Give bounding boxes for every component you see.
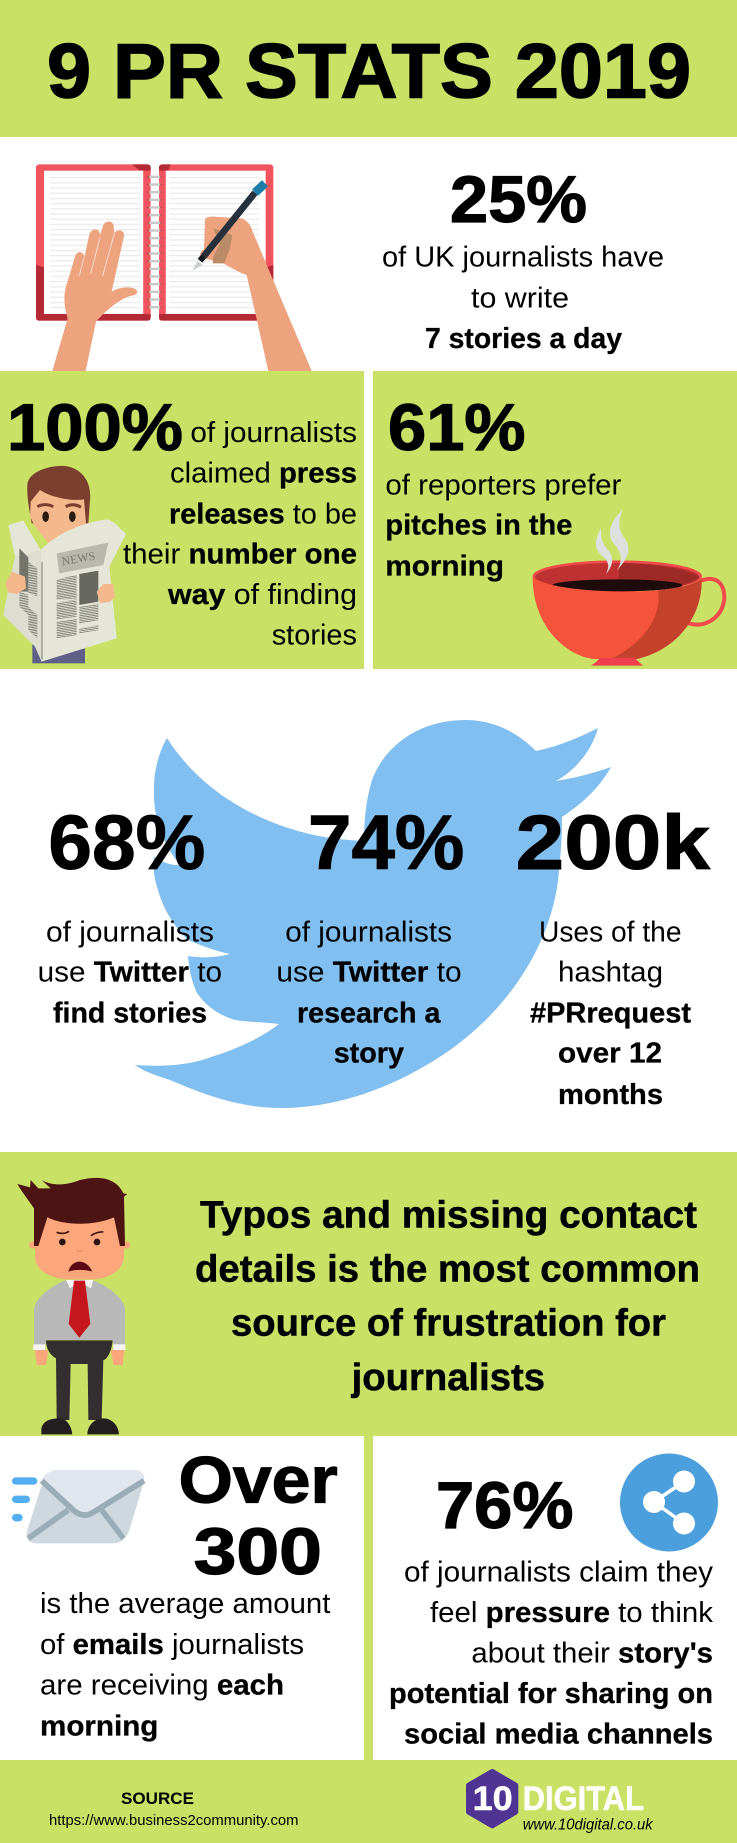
stat: 200k: 200k <box>516 800 710 886</box>
text: press releases: claimed press <box>170 458 357 490</box>
logo: 10 Digital: DIGITAL <box>523 1780 644 1818</box>
title: 9 PR STATS 2019 <box>47 29 691 115</box>
text: UK journalists: 7 stories a day <box>425 323 622 355</box>
stat: 68%: 68% <box>48 800 205 886</box>
icon: flying envelope <box>12 1470 144 1543</box>
panel: 25% stories a day <box>36 162 664 371</box>
stat: 76%: 76% <box>436 1468 573 1542</box>
icon: frustrated man <box>17 1178 130 1434</box>
text: average emails: is the average amount <box>40 1588 330 1620</box>
panel: twitter statistics <box>38 720 710 1111</box>
icon: twitter bird <box>135 720 611 1108</box>
title banner <box>0 0 737 137</box>
stat: over 300: Over <box>179 1443 338 1517</box>
text: press releases: of journalists <box>190 417 357 449</box>
left hand <box>52 221 137 371</box>
text: UK journalists: of UK journalists have <box>382 242 664 274</box>
text: reporters prefer: of reporters prefer <box>385 469 622 501</box>
text: press releases: releases to be <box>169 498 357 530</box>
text: research a story: research a <box>297 998 441 1030</box>
text: find stories: of journalists <box>46 917 214 949</box>
stat: 25%: 25% <box>450 162 587 236</box>
source credit: https://www.business2community.com <box>49 1812 298 1829</box>
logo: 10 Digital <box>469 1772 654 1833</box>
stat: 61%: 61% <box>388 390 526 464</box>
text: average emails: are receiving each <box>40 1669 284 1701</box>
pen <box>192 183 265 271</box>
heading: typos and missing contact details: journalists <box>351 1357 545 1399</box>
text: pressure to share: about their story's <box>471 1638 713 1670</box>
text: find stories <box>38 917 222 1030</box>
text: hashtag uses: months <box>558 1079 663 1111</box>
text: research a story: of journalists <box>285 917 452 949</box>
icon: share circle <box>620 1454 718 1552</box>
text: pressure to share: of journalists claim they <box>404 1557 714 1589</box>
text: hashtag uses: #PRrequest <box>530 998 691 1030</box>
source credit: SOURCE <box>121 1789 194 1808</box>
stat: over 300: 300 <box>194 1514 322 1588</box>
text: hashtag uses: over 12 <box>558 1038 662 1070</box>
text: research a story: use Twitter to <box>276 957 462 989</box>
stat: over 300 <box>179 1443 338 1588</box>
icon: red coffee cup <box>533 509 724 666</box>
text: average emails: of emails journalists <box>40 1629 304 1661</box>
logo: 10 Digital: 10 <box>473 1780 513 1818</box>
heading: typos and missing contact details: details is the most common <box>195 1249 700 1291</box>
text: hashtag uses <box>530 917 691 1111</box>
text: UK journalists: to write <box>471 282 569 314</box>
heading: typos and missing contact details <box>195 1194 700 1399</box>
newspaper masthead: NEWS <box>60 549 96 568</box>
text: find stories: find stories <box>53 998 207 1030</box>
steam <box>596 509 628 574</box>
text: reporters prefer: pitches in the <box>385 510 572 542</box>
text: press releases: stories <box>272 619 357 651</box>
panel: journalist frustration <box>0 1152 737 1436</box>
text: press releases: their number one <box>123 539 357 571</box>
icon: man reading newspaper <box>3 466 126 663</box>
stat: 74%: 74% <box>308 800 464 886</box>
text: pressure to share: potential for sharing on <box>389 1678 713 1710</box>
text: average emails <box>40 1588 330 1742</box>
text: research a story <box>276 917 462 1070</box>
text: pressure to share <box>389 1557 714 1750</box>
text: reporters prefer <box>385 469 622 582</box>
text: hashtag uses: hashtag <box>558 957 663 989</box>
heading: typos and missing contact details: source of frustration for <box>231 1303 666 1345</box>
icon: notebook with hands writing <box>36 164 312 371</box>
text: press releases: way of finding <box>167 579 357 611</box>
right hand and arm <box>200 217 312 371</box>
text: pressure to share: social media channels <box>404 1718 713 1750</box>
text: research a story: story <box>334 1038 404 1070</box>
panel: 76% social pressure <box>389 1454 718 1750</box>
text: hashtag uses: Uses of the <box>539 917 682 949</box>
heading: typos and missing contact details: Typos and missing contact <box>200 1194 697 1236</box>
divider between lower panels <box>364 1436 373 1760</box>
text: reporters prefer: morning <box>385 550 504 582</box>
logo: 10 Digital: www.10digital.co.uk <box>523 1816 654 1833</box>
panel: over 300 emails <box>12 1443 338 1742</box>
panel: 61% morning pitches <box>373 371 737 669</box>
text: press releases <box>123 417 357 651</box>
source credit <box>49 1789 298 1829</box>
text: average emails: morning <box>40 1710 158 1742</box>
stat: 100%: 100% <box>7 390 183 464</box>
panel: 100% press releases <box>0 371 364 669</box>
text: pressure to share: feel pressure to think <box>430 1597 714 1629</box>
text: find stories: use Twitter to <box>38 957 222 989</box>
footer <box>0 1760 737 1843</box>
text: UK journalists <box>382 242 664 355</box>
